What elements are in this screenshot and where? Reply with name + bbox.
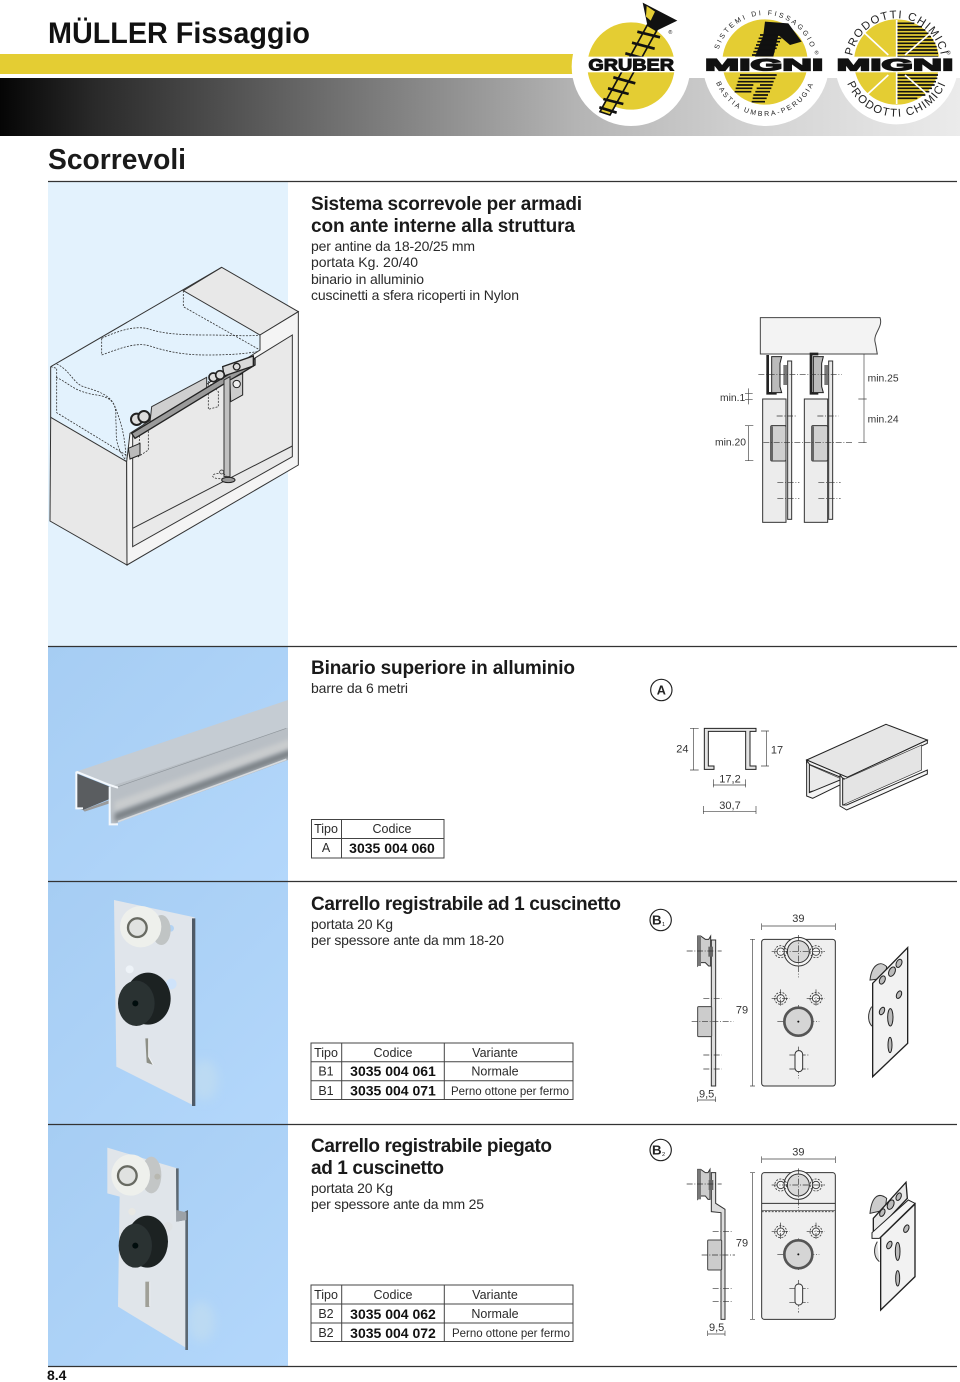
table: B2 codes: B2 xyxy=(318,1307,334,1321)
logo: Migni prodotti chimici: MIGNI xyxy=(837,56,953,75)
table: B2 codes: 3035 004 062 xyxy=(350,1306,436,1322)
dimension labels: min.20 xyxy=(715,438,746,449)
photo: carriage B1 xyxy=(114,900,218,1106)
section: sliding system text: Sistema scorrevole per armadi xyxy=(311,194,582,215)
table: rail A codes: 3035 004 060 xyxy=(349,840,435,856)
section: sliding system text: binario in alluminio xyxy=(311,271,424,287)
table: B1 codes: Codice xyxy=(374,1046,412,1060)
dimension labels: min.25 xyxy=(868,374,899,385)
table: B2 codes: Tipo xyxy=(314,1288,338,1302)
table: rail A codes: Tipo xyxy=(314,822,338,836)
table: rail A codes xyxy=(312,820,444,858)
diagram: carriage B2: 79 xyxy=(736,1237,748,1249)
diagram: carriage B2: 9,5 xyxy=(709,1322,724,1334)
heading: Scorrevoli: Scorrevoli xyxy=(48,144,186,176)
table: B2 codes: B2 xyxy=(318,1326,334,1340)
section: carriage B1 text xyxy=(311,894,621,948)
diagram: isometric cabinet xyxy=(50,267,298,565)
dimension labels xyxy=(715,374,899,449)
section: sliding system text: portata Kg. 20/40 xyxy=(311,254,418,270)
table: rail A codes: Codice xyxy=(373,822,411,836)
diagram: rail A: 17,2 xyxy=(719,774,741,786)
badge A xyxy=(651,679,672,701)
table: B2 codes: Variante xyxy=(472,1288,518,1302)
diagram: carriage B1: 9,5 xyxy=(699,1089,714,1101)
table: B1 codes: Tipo xyxy=(314,1046,338,1060)
yellow header band xyxy=(0,54,590,74)
table: rail A codes: A xyxy=(322,841,331,855)
logo: Gruber: GRUBER xyxy=(588,55,674,74)
logo: Migni sistemi di fissaggio xyxy=(704,10,828,126)
section: sliding system text: con ante interne alla struttura xyxy=(311,216,575,237)
badge B1: B xyxy=(652,913,662,928)
table: B1 codes: 3035 004 061 xyxy=(350,1063,436,1079)
diagram: carriage B2 xyxy=(650,1139,915,1336)
section: aluminium rail text: barre da 6 metri xyxy=(311,680,408,696)
table: B2 codes: Normale xyxy=(471,1307,519,1321)
table: B1 codes: B1 xyxy=(318,1084,334,1098)
table: B1 codes: Variante xyxy=(472,1046,518,1060)
table: B1 codes: Perno ottone per fermo xyxy=(451,1084,569,1098)
table: B2 codes xyxy=(311,1285,573,1342)
table: B2 codes: Perno ottone per fermo xyxy=(452,1326,570,1340)
section: carriage B1 text: per spessore ante da mm 18-20 xyxy=(311,932,504,948)
section: carriage B2 text xyxy=(311,1136,552,1212)
logos group xyxy=(572,2,956,126)
logo: Migni prodotti chimici: PRODOTTI CHIMICI xyxy=(848,80,946,117)
diagram: section with minimum distances xyxy=(715,318,899,522)
panel: pale blue cabinet background xyxy=(48,182,288,646)
section: carriage B2 text: portata 20 Kg xyxy=(311,1180,393,1196)
logo: Migni sistemi di fissaggio: SISTEMI DI FISSAGGIO xyxy=(714,10,814,49)
panel: blue photo background rail xyxy=(48,647,288,881)
title: Müller Fissaggio: MÜLLER Fissaggio xyxy=(48,17,310,50)
diagram: carriage B1: 39 xyxy=(792,913,804,925)
badge A: A xyxy=(657,683,666,697)
logo: Gruber xyxy=(572,3,690,126)
table: B1 codes: 3035 004 071 xyxy=(350,1082,436,1098)
diagram: carriage B1: 79 xyxy=(736,1005,748,1017)
badge B2 xyxy=(650,1139,671,1161)
section: carriage B1 text: Carrello registrabile ad 1 cuscinetto xyxy=(311,894,621,915)
badge B1 xyxy=(650,909,671,931)
table: B2 codes: Codice xyxy=(374,1288,412,1302)
section: sliding system text: per antine da 18-20/25 mm xyxy=(311,238,475,254)
photo: carriage B2 xyxy=(107,1148,215,1350)
table: B1 codes xyxy=(311,1043,573,1100)
logo: Migni prodotti chimici: PRODOTTI CHIMICI xyxy=(844,10,948,55)
logo: Migni prodotti chimici: ® xyxy=(947,50,951,57)
table: B1 codes: B1 xyxy=(318,1064,334,1078)
dimension labels: min.24 xyxy=(868,415,899,426)
section: carriage B1 text: portata 20 Kg xyxy=(311,916,393,932)
logo: Migni sistemi di fissaggio: ® xyxy=(815,50,819,57)
dimension labels: min.1 xyxy=(720,393,746,404)
badge B2: 2 xyxy=(662,1152,665,1158)
section: sliding system text: cuscinetti a sfera ricoperti in Nylon xyxy=(311,287,519,303)
section: carriage B2 text: Carrello registrabile piegato xyxy=(311,1136,552,1157)
logo: Gruber: ® xyxy=(668,29,672,36)
logo: Migni sistemi di fissaggio: BASTIA UMBRA-PERUGIA xyxy=(716,81,814,116)
badge B1: 1 xyxy=(662,922,665,928)
section: aluminium rail text xyxy=(311,658,575,696)
logo: Migni sistemi di fissaggio: MIGNI xyxy=(705,56,823,75)
section: aluminium rail text: Binario superiore in alluminio xyxy=(311,658,575,679)
photo: aluminium rail xyxy=(68,698,291,827)
logo: Migni prodotti chimici xyxy=(837,10,956,124)
diagram: rail A: 30,7 xyxy=(719,800,741,812)
grey gradient header band xyxy=(0,78,960,136)
section: sliding system text xyxy=(311,194,582,303)
diagram: rail A: 17 xyxy=(771,744,783,756)
table: B1 codes: Normale xyxy=(471,1064,519,1078)
section: carriage B2 text: per spessore ante da mm 25 xyxy=(311,1196,484,1212)
table: B2 codes: 3035 004 072 xyxy=(350,1325,436,1341)
diagram: carriage B1 xyxy=(650,909,908,1102)
diagram: rail A: 24 xyxy=(676,744,688,756)
panel: blue photo background B2 xyxy=(48,1125,288,1366)
section: carriage B2 text: ad 1 cuscinetto xyxy=(311,1158,444,1179)
panel: blue photo background B1 xyxy=(48,882,288,1124)
badge B2: B xyxy=(652,1143,662,1158)
diagram: rail A xyxy=(651,679,927,814)
diagram: carriage B2: 39 xyxy=(792,1146,804,1158)
